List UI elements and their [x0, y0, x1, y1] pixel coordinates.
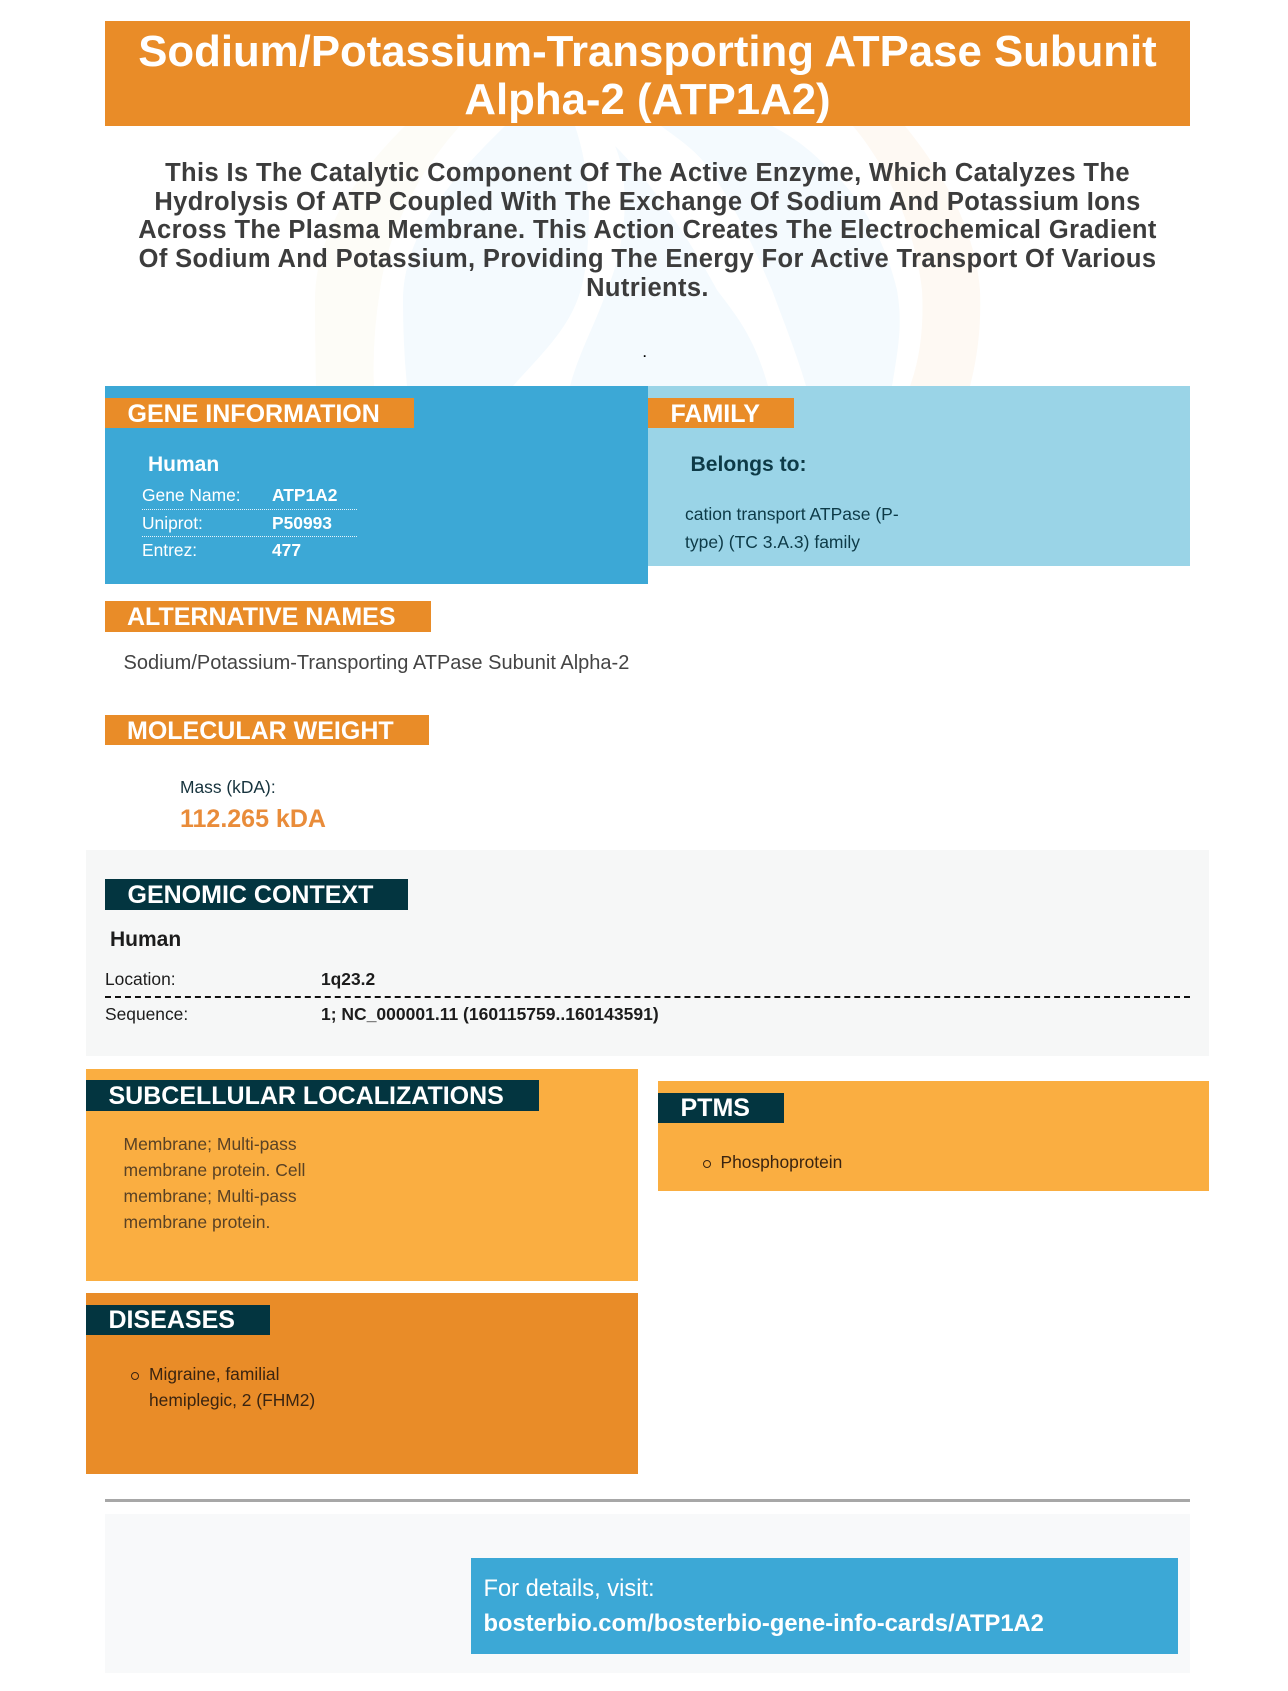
panel: gene information [105, 386, 648, 584]
heading: genomic context: GENOMIC CONTEXT [128, 881, 373, 909]
heading: diseases: DISEASES [108, 1306, 235, 1334]
heading: gene information: GENE INFORMATION [128, 400, 380, 428]
localization text: membrane protein. [124, 1212, 270, 1232]
sequence row: Sequence: [105, 1004, 188, 1024]
heading: diseases [86, 1305, 270, 1335]
localization text: Membrane; Multi-pass [124, 1134, 297, 1154]
localization text: membrane; Multi-pass [124, 1186, 297, 1206]
description text [138, 159, 1157, 302]
ptm list item: Phosphoprotein [720, 1152, 842, 1172]
heading: alternative names: ALTERNATIVE NAMES [127, 603, 396, 631]
description text: Hydrolysis Of ATP Coupled With The Exchange Of Sodium And Potassium Ions [154, 188, 1141, 216]
heading: subcellular localizations: SUBCELLULAR LOCALIZATIONS [108, 1082, 504, 1110]
location row: 1q23.2 [321, 969, 375, 989]
panel: footer [105, 1514, 1190, 1673]
entrez row: Entrez: [142, 540, 197, 560]
species label: Human [148, 453, 219, 476]
panel: ptms [658, 1081, 1209, 1191]
heading: ptms [658, 1093, 784, 1123]
heading: ptms: PTMS [680, 1094, 750, 1122]
uniprot row [142, 513, 332, 533]
heading: family [648, 398, 794, 428]
disease list item: hemiplegic, 2 (FHM2) [149, 1390, 315, 1410]
alternative names text: Sodium/Potassium-Transporting ATPase Subunit Alpha-2 [124, 652, 629, 674]
mass value: 112.265 kDA [180, 805, 326, 833]
localization text [124, 1134, 305, 1232]
disease list item: Migraine, familial [149, 1364, 279, 1384]
mass label: Mass (kDA): [180, 777, 276, 797]
species label: Human [110, 928, 181, 951]
title banner: Alpha-2 (ATP1A2) [464, 75, 831, 124]
description text: Across The Plasma Membrane. This Action Creates The Electrochemical Gradient [138, 216, 1157, 244]
heading: molecular weight: MOLECULAR WEIGHT [127, 717, 394, 745]
heading: family: FAMILY [670, 400, 760, 428]
panel: diseases [86, 1293, 638, 1474]
family text: type) (TC 3.A.3) family [685, 532, 860, 552]
stray period: . [643, 346, 646, 360]
panel: subcellular localizations [86, 1069, 638, 1281]
description text: Of Sodium And Potassium, Providing The Energy For Active Transport Of Various [139, 245, 1156, 273]
callout: details link [471, 1558, 1178, 1654]
belongs to label: Belongs to: [690, 453, 807, 476]
details url: bosterbio.com/bosterbio-gene-info-cards/ATP1A2 [484, 1610, 1044, 1637]
gene name row [142, 485, 337, 505]
entrez row [142, 540, 301, 560]
location row [105, 969, 375, 989]
description text: Nutrients. [586, 274, 709, 302]
entrez row: 477 [272, 540, 301, 560]
location row: Location: [105, 969, 176, 989]
family text [685, 504, 899, 552]
title banner [105, 21, 1190, 126]
localization text: membrane protein. Cell [124, 1160, 305, 1180]
description text: This Is The Catalytic Component Of The Active Enzyme, Which Catalyzes The [165, 159, 1130, 187]
sequence row: 1; NC_000001.11 (160115759..160143591) [321, 1004, 659, 1024]
family text: cation transport ATPase (P- [685, 504, 899, 524]
uniprot row: Uniprot: [142, 513, 203, 533]
uniprot row: P50993 [272, 513, 332, 533]
disease list item [131, 1364, 315, 1410]
panel: genomic context [86, 850, 1209, 1056]
gene name row: Gene Name: [142, 485, 241, 505]
sequence row [105, 1004, 659, 1024]
panel: family [648, 386, 1190, 566]
title banner: Sodium/Potassium-Transporting ATPase Subunit [138, 27, 1157, 76]
gene name row: ATP1A2 [272, 485, 337, 505]
details label: For details, visit: [484, 1576, 655, 1602]
